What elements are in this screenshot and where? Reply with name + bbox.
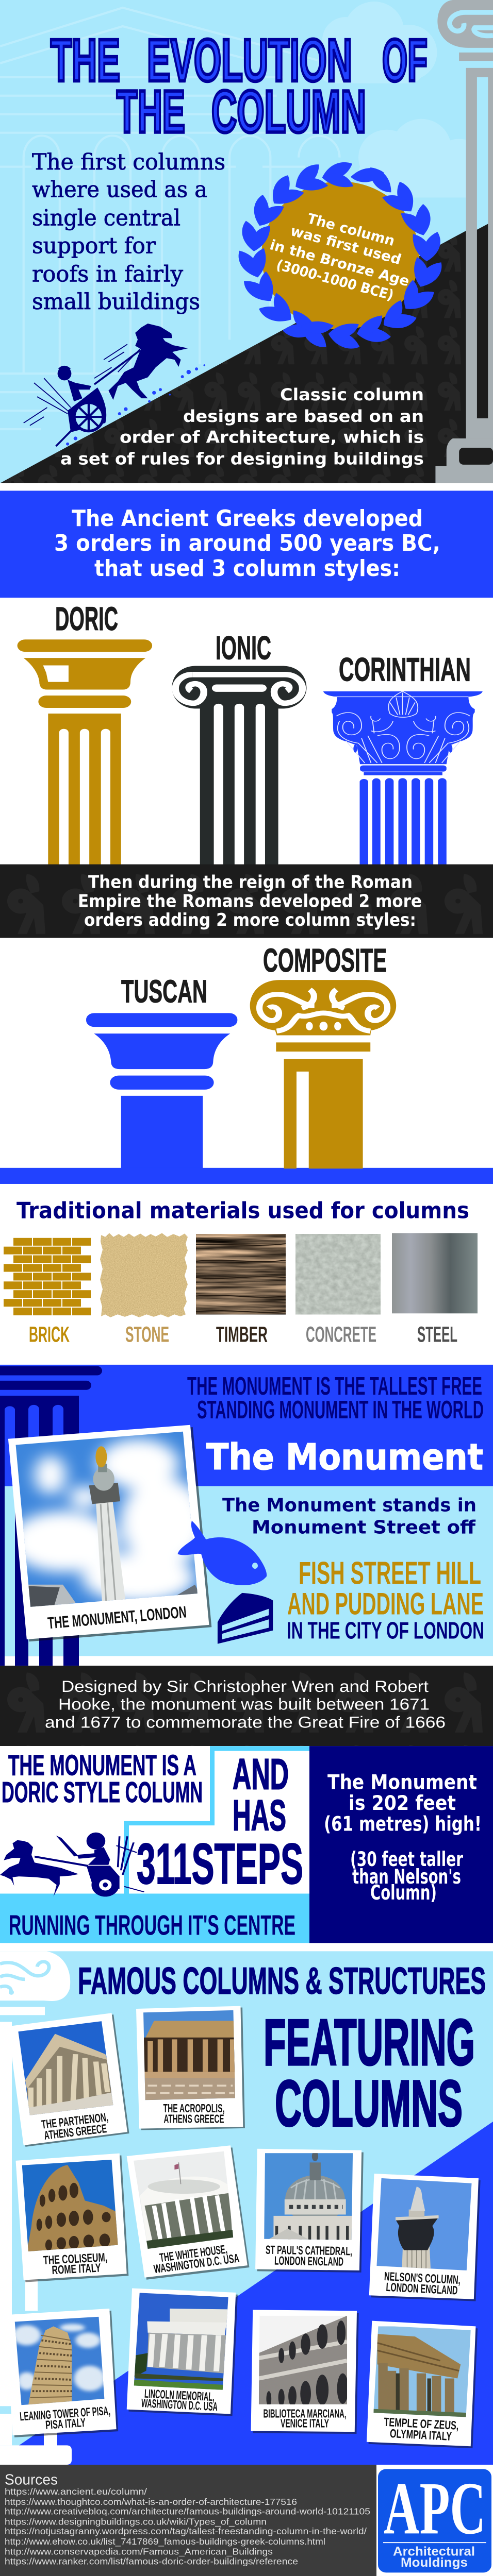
list: source links: https://www.ranker.com/list/famous-doric-order-buildings/reference <box>5 2556 298 2566</box>
text: first columns: single central <box>32 205 180 231</box>
panel: monument height <box>309 1746 493 1943</box>
text: and has 311 steps: 311STEPS <box>137 1832 303 1896</box>
logo: APC architectural mouldings: Architectural <box>393 2544 475 2558</box>
polaroid: the monument photo <box>0 1425 220 1641</box>
text: first columns: roofs in fairly <box>32 261 184 287</box>
text: and has 311 steps: AND <box>233 1750 289 1799</box>
badge: bronze age laurel wreath: The column <box>305 210 397 249</box>
heading: sources: Sources <box>5 2471 58 2488</box>
list: source links: https://www.thoughtco.com/what-is-an-order-of-architecture-177516 <box>5 2496 297 2507</box>
badge: bronze age laurel wreath <box>207 132 473 379</box>
polaroid: acropolis <box>136 2006 245 2130</box>
badge: bronze age laurel wreath: in the Bronze Age <box>268 236 412 290</box>
column: tuscan <box>0 1013 493 1184</box>
cyan stepped border <box>0 1746 309 1943</box>
title: THE <box>51 27 120 94</box>
text: roman empire: Then during the reign of the Roman <box>88 873 413 892</box>
polaroid: coliseum: ROME ITALY <box>52 2261 101 2277</box>
text: monument street: Monument Street off <box>252 1517 476 1538</box>
label: ionic: IONIC <box>216 629 271 666</box>
polaroid: white house: WASHINGTON D.C. USA <box>153 2251 240 2276</box>
column: doric <box>18 639 152 866</box>
polaroid: temple of zeus <box>367 2321 478 2448</box>
polaroid: biblioteca marciana <box>251 2310 359 2434</box>
title <box>51 27 428 145</box>
panel: roman orders <box>0 865 493 1184</box>
polaroid: parthenon: ATHENS GREECE <box>43 2122 107 2143</box>
text: classic column designs: order of Architecture, which is <box>120 427 424 447</box>
icon: fish <box>177 1521 267 1585</box>
polaroid: coliseum <box>15 2154 128 2282</box>
swatch: steel <box>392 1233 478 1313</box>
badge: bronze age laurel wreath: (3000-1000 BCE) <box>274 257 396 303</box>
panel: traditional materials <box>4 1198 478 1347</box>
polaroid: st paul's cathedral: LONDON ENGLAND <box>274 2254 343 2269</box>
list: source links: http://www.conservapedia.com/Famous_American_Buildings <box>5 2546 273 2557</box>
icon: slice of pudding <box>218 1593 273 1644</box>
swatch: brick <box>4 1238 91 1315</box>
panel: ancient greek orders <box>0 490 493 866</box>
caption: coliseum: THE COLISEUM, <box>43 2251 108 2267</box>
list: source links: http://www.ehow.co.uk/list_7417869_famous-buildings-greek-columns.html <box>5 2536 325 2547</box>
label: doric: DORIC <box>55 600 118 637</box>
list: source links: https://notjustagranny.wordpress.com/tag/tallest-freestanding-column-in-the-world/ <box>5 2526 367 2536</box>
grey column <box>435 0 493 483</box>
heading: ancient greeks <box>54 505 440 581</box>
panel: the monument <box>0 1365 493 1666</box>
list: source links: https://www.designingbuildings.co.uk/wiki/Types_of_column <box>5 2516 267 2527</box>
text: monument street <box>222 1495 476 1538</box>
polaroid: temple of zeus: OLYMPIA ITALY <box>389 2427 452 2444</box>
swatch: stone <box>100 1233 188 1317</box>
label: stone: STONE <box>125 1323 169 1347</box>
icon: warrior chariot <box>0 1833 144 1896</box>
polaroid: nelson's column <box>369 2174 481 2301</box>
caption: st paul's cathedral: ST PAUL'S CATHEDRAL, <box>266 2243 352 2258</box>
label: timber: TIMBER <box>216 1323 268 1347</box>
text: wren and hooke <box>45 1677 446 1731</box>
text: running through centre: RUNNING THROUGH IT'S CENTRE <box>9 1909 295 1941</box>
polaroid: st paul's cathedral <box>255 2149 364 2273</box>
panel: famous columns and structures <box>0 1951 493 2465</box>
navy column backdrop <box>0 1366 493 1666</box>
text: roman empire: Empire the Romans developed 2 more <box>78 891 422 911</box>
caption: lincoln memorial: LINCOLN MEMORIAL, <box>144 2387 215 2404</box>
text: and has 311 steps: HAS <box>233 1791 286 1840</box>
list: source links: https://www.ancient.eu/column/ <box>5 2486 147 2497</box>
caption: white house: THE WHITE HOUSE, <box>159 2243 228 2265</box>
text: doric style column: THE MONUMENT IS A <box>8 1749 196 1782</box>
white column backdrop <box>0 1951 72 2465</box>
title: COLUMN <box>211 78 366 145</box>
swatch: timber <box>196 1234 286 1314</box>
text: wren and hooke: Hooke, the monument was built between 1671 <box>58 1695 430 1713</box>
column: ionic <box>172 666 306 866</box>
caption: acropolis: THE ACROPOLIS, <box>163 2102 225 2115</box>
panel: doric style and 311 steps <box>0 1746 493 1943</box>
caption: leaning tower of pisa: LEANING TOWER OF PISA, <box>19 2404 111 2424</box>
polaroid: biblioteca marciana: VENICE ITALY <box>281 2417 329 2430</box>
text: roman empire: orders adding 2 more column styles: <box>84 910 416 930</box>
text: first columns: The first columns <box>32 149 225 175</box>
text: wren and hooke: Designed by Sir Christopher Wren and Robert <box>61 1677 429 1696</box>
polaroid: lincoln memorial: WASHINGTON D.C. USA <box>141 2397 218 2414</box>
label: tuscan: TUSCAN <box>121 973 207 1009</box>
polaroid: leaning tower of pisa <box>5 2309 118 2437</box>
panel: designed by <box>0 1666 493 1746</box>
panel: monument height: Column) <box>370 1880 437 1905</box>
badge: bronze age laurel wreath: was first used <box>288 223 403 268</box>
icon: chariot and rearing horse <box>24 324 188 446</box>
black slope <box>0 216 493 483</box>
text: doric style column <box>2 1749 203 1809</box>
polaroid: leaning tower of pisa: PISA ITALY <box>45 2416 86 2432</box>
text: roman empire <box>78 873 422 930</box>
list: source links: http://www.creativebloq.com/architecture/famous-buildings-around-world-10121105 <box>5 2506 370 2517</box>
heading: featuring columns <box>264 2006 475 2140</box>
polaroid: parthenon <box>8 2013 129 2147</box>
background clouds <box>318 2 487 198</box>
text: first columns: small buildings <box>32 289 200 315</box>
text: wren and hooke: and 1677 to commemorate the Great Fire of 1666 <box>45 1713 446 1731</box>
title: THE <box>117 78 185 145</box>
panel: hero introduction <box>0 0 493 483</box>
swatch: concrete <box>295 1234 381 1314</box>
panel: sources <box>0 2465 376 2576</box>
text: monument street: The Monument stands in <box>222 1495 476 1516</box>
text: fish street hill and pudding lane <box>287 1555 484 1644</box>
caption: the monument: THE MONUMENT, LONDON <box>47 1602 187 1632</box>
caption: biblioteca marciana: BIBLIOTECA MARCIANA, <box>263 2407 347 2420</box>
text: first columns <box>32 149 225 315</box>
label: concrete: CONCRETE <box>306 1323 376 1347</box>
list: source links <box>5 2486 370 2566</box>
stones on the slope <box>66 364 205 446</box>
heading: ancient greeks: 3 orders in around 500 years BC, <box>54 530 440 556</box>
caption: parthenon: THE PARTHENON, <box>41 2111 109 2131</box>
column: composite <box>250 980 396 1168</box>
polaroid: acropolis: ATHENS GREECE <box>163 2112 224 2126</box>
background temple outline <box>0 8 339 429</box>
text: first columns: where used as a <box>32 177 207 202</box>
text: classic column designs: a set of rules for designing buildings <box>60 449 424 468</box>
label: composite: COMPOSITE <box>263 942 387 979</box>
text: classic column designs: Classic column <box>280 385 424 404</box>
heading: ancient greeks: that used 3 column styles: <box>94 555 400 581</box>
panel: monument height: is 202 feet <box>349 1791 456 1815</box>
polaroid: lincoln memorial <box>127 2288 238 2416</box>
column: corinthian <box>323 691 483 866</box>
text: first columns: support for <box>32 233 156 259</box>
title: OF <box>382 27 428 94</box>
text: and has 311 steps <box>137 1750 303 1896</box>
text: classic column designs: designs are based on an <box>183 406 424 426</box>
text: classic column designs <box>60 385 424 468</box>
text: doric style column: DORIC STYLE COLUMN <box>2 1776 203 1809</box>
text: tallest free standing <box>187 1372 484 1424</box>
logo: APC architectural mouldings: Mouldings <box>401 2555 468 2570</box>
label: steel: STEEL <box>417 1323 457 1347</box>
label: brick: BRICK <box>29 1323 70 1347</box>
polaroid: white house <box>127 2145 249 2280</box>
heading: ancient greeks: The Ancient Greeks developed <box>72 505 423 532</box>
